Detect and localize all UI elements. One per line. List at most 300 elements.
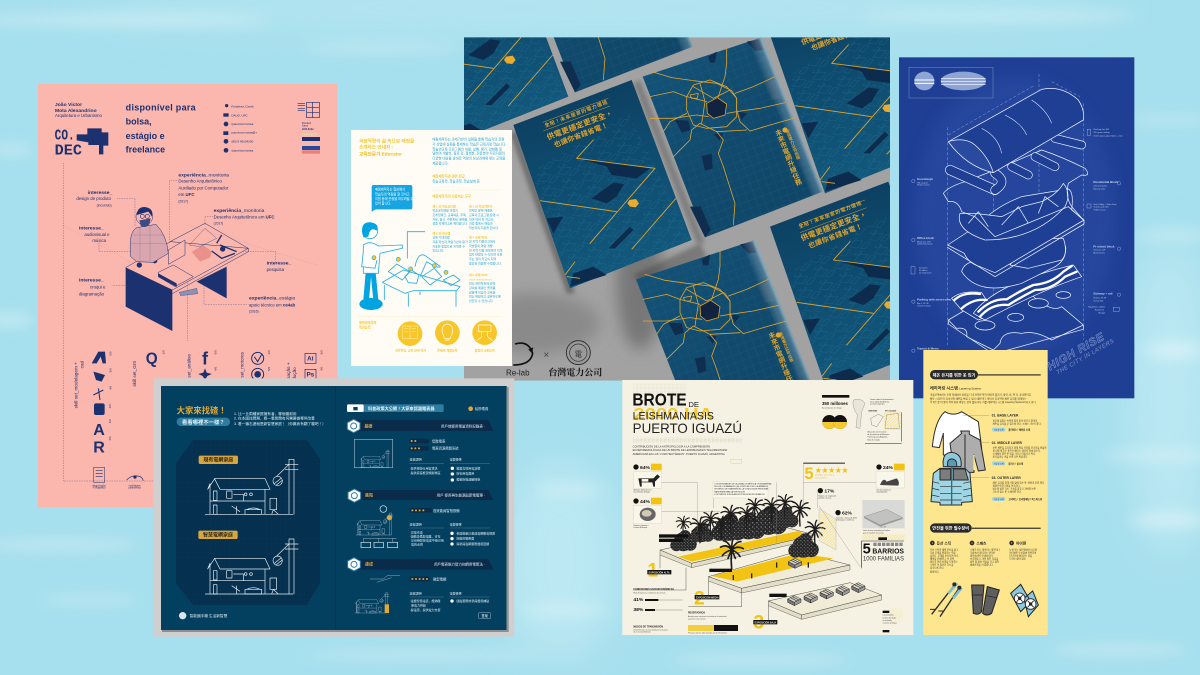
layer descriptions: 피부에 닿말는 속옷이 땀이 몸이 마르고 땀이서: [993, 418, 1037, 422]
section: level three: 用戶電表能力智力抑調用電策法 ·: [434, 562, 485, 567]
skill set columns: 5/6: [320, 350, 324, 354]
title: [632, 390, 742, 436]
item 3: crampons: 아이젠: [1016, 540, 1027, 545]
left bottom stats: [633, 588, 683, 634]
skills list: 최신 매핑하고 공유하도록: [469, 294, 501, 299]
booklet: cover right bottom: 也讓你省錢省電！: [807, 221, 864, 250]
right heading: 給節電費: [475, 406, 489, 411]
core competencies: 핵심능력: [359, 325, 371, 330]
illustration: existing home: [205, 459, 298, 514]
skill set columns: 5/6: [109, 368, 113, 372]
person illustration: [130, 207, 168, 262]
panel: pink portfolio poster: [38, 84, 337, 507]
world stats block: en la región de América: [870, 400, 890, 403]
stats 64% cattle: 64%: [640, 465, 651, 471]
related specialties: [432, 173, 501, 190]
annotation labels left: Mixed use, 12F: [917, 241, 931, 243]
label: smart home: 智慧電網家庭: [203, 532, 233, 539]
name block: Mota Alexandrino: [55, 108, 97, 114]
layer descriptions: 03. OUTER LAYER: [992, 476, 1021, 480]
headline availability: [126, 102, 197, 155]
label: existing home: [199, 456, 238, 464]
section: level three: [348, 558, 493, 619]
name block: Arquitetura e Urbanismo: [55, 113, 103, 118]
illustration: smart home: [205, 539, 298, 594]
skill set columns: 4/6: [108, 436, 112, 441]
item 2: gloves: 스패츠 또는 게이터는 발목이나: [970, 548, 1001, 552]
layer descriptions: 기능성 소재: [994, 428, 1004, 432]
booklet: cover right bottom: 供電更穩定更安全，: [799, 209, 868, 243]
subtitle: AMERICANA EN LAS "2.000 HECTÁREAS", PUERTO IGUAZÚ, ARGENTINA: [633, 451, 725, 456]
skills list: 매핑제작자의 사용하는 도구: [432, 193, 471, 198]
speech bubble: 지원 등에 관정을 마우려될 수: [375, 196, 413, 201]
section: level three: 建置說明: [410, 590, 422, 595]
annotation labels right: Services, 12F: [1093, 249, 1106, 252]
headline availability: freelance: [126, 145, 165, 155]
5 barrios: 5: [863, 542, 871, 558]
item 2: gloves: 발목에서의 오염에 따라: [970, 554, 994, 558]
header pill: 체온 유지를 위한 옷 입기: [933, 371, 976, 377]
skills list: 전 지역 지원하고에서: [469, 239, 496, 244]
side logos and chart: [298, 102, 320, 154]
world stats block: de la provincia de Misiones: [867, 434, 889, 436]
title: DE: [688, 400, 699, 409]
booklet: map centre: 臺灣電力公司出版: [784, 127, 802, 160]
intro paragraph: 다양한 대상을 상대로 역량의 보상과제에 맞는 교육을: [432, 155, 505, 160]
annotation labels left: Parking with street view: [917, 298, 952, 302]
annotation labels left: Transit terminal: [917, 305, 931, 308]
skills list: 각종 학습자 역량기반의 평가: [432, 239, 468, 244]
logos: Re-lab and Taiwan Power Company: 台灣電力公司: [548, 365, 602, 378]
annotation labels right: Guests and retail: [1094, 206, 1109, 209]
title: BROTE: [632, 390, 687, 410]
annotation labels left: 50 stories: [919, 266, 928, 269]
five star rating: menos de 1m: [815, 478, 827, 480]
booklet: map bottom: 未來市電網升級任務: [766, 330, 796, 391]
annotation labels left: Commercial zone: [917, 243, 933, 246]
section: level two: 電費優惠: [450, 521, 462, 526]
callouts: apoio técnico em ce4ab: [249, 302, 296, 307]
yellow hatch wall: [819, 508, 836, 550]
booklet: cover centre: 也讓你省錢省電！: [553, 120, 609, 149]
world stats block: Lorem sobre la leishmaniasis: [870, 399, 894, 401]
intro paragraph: 학술연교육 프로그램의 개발, 실행, 평가, 강화를 정: [432, 146, 502, 151]
layer descriptions: 환경으로부터 몸을 보호한다.: [993, 484, 1021, 488]
skill set columns: R: [93, 439, 105, 456]
house plot detail: [862, 500, 905, 540]
poster title: HIGH RISE: [1045, 331, 1107, 373]
annotation labels right: Roof top bar, 30F: [1094, 128, 1110, 131]
skill set columns: 4/6: [108, 404, 112, 408]
section: level one: 用戶端使用電量資料記錄表 ·: [441, 423, 485, 428]
logo: CO.DEC: [55, 128, 108, 154]
side logos and chart: Hi!3.3xbc: [302, 127, 314, 131]
left heading: [177, 405, 326, 426]
left heading: 3. 看一遍右邊就是新智慧家庭！（你贏我有翻了喔吧！）: [234, 421, 326, 426]
right bottom notes: [883, 608, 903, 632]
world stats block: MISIONES: [868, 411, 878, 413]
item 1: trekking poles: 무릎 무게를 완화하는 역할: [930, 551, 956, 555]
logo: CO.DEC: DEC: [55, 143, 82, 159]
annotation labels left: Sourdough: [917, 177, 933, 181]
layer descriptions: 기능성 소재: [994, 461, 1004, 465]
illustration: mid layer fleece: [950, 431, 985, 472]
skills list: 과정 중에서 매핑과: [469, 221, 493, 226]
header pill: [930, 370, 1041, 379]
section: level three: 電費優惠: [450, 590, 462, 595]
stats 17%: 17%: [824, 489, 835, 495]
layer descriptions: 소재에서 좋은 옷 입을 가지고 어울리기 적다.: [993, 452, 1036, 456]
item 1: trekking poles: 등산 스틱은 체중 분산을 돕고: [930, 548, 959, 552]
annotation labels left: 12 retail levels: [919, 272, 932, 275]
layer descriptions: 01. BASE LAYER: [992, 414, 1019, 418]
callouts: design de produto: [76, 196, 112, 201]
annotation labels left: Bay 1, 2F, 3F: [917, 303, 929, 305]
skills list: 검증 자체하고로 제작합니다.: [432, 221, 468, 226]
section: level two: ·儲能設備與電器，可在: [410, 534, 441, 539]
skill set columns: 5/6: [267, 367, 271, 371]
annotation labels right: Atrium levels: [1093, 251, 1105, 254]
stats 24%: el peridomicilio: [876, 491, 887, 493]
bacon stripes: [952, 265, 1082, 320]
annotation labels right: Transit hub: [1093, 299, 1104, 302]
booklet: map bottom: 臺灣電力公司出版: [778, 330, 795, 363]
section: level one: 低階電表: [432, 438, 446, 443]
right bottom notes: cercanas al bosque: [883, 623, 897, 625]
callouts: [76, 172, 296, 313]
centre note: MANTIENEN PARA LA EXPOSICIÓN.: [714, 490, 746, 493]
left bottom stats: de un insecto flebótomo: [633, 631, 651, 634]
annotation labels right: Residential Block: [1093, 180, 1119, 184]
left bottom stats: 41%: [633, 597, 644, 603]
right heading: [347, 404, 489, 412]
world stats block: Ubicación en el noreste: [867, 430, 886, 433]
palm trees and bushes: [670, 495, 825, 580]
item 2: gloves: [970, 540, 1001, 615]
item 3: crampons: 눈길 또는 빙판길에서 미끄럼: [1009, 548, 1037, 552]
centre note: ROL EN LOS ANIMALES QUE CONVIVEN CON LOS ANIMALES: [714, 485, 769, 488]
annotation labels right: Green space, glass floors + view: [1094, 134, 1123, 137]
skills list: 강의를 매핑인 플랫폼: [469, 285, 496, 290]
related specialties: 학습교육학, 학습과학, 학습설계 등: [432, 178, 480, 183]
skill set columns: [73, 348, 324, 490]
exposure level labels: 2: [694, 588, 705, 609]
item 1: trekking poles: 장비이다.: [930, 569, 940, 573]
headline availability: estágio e: [126, 131, 165, 141]
skill set columns: skill set_GIS: [132, 361, 137, 387]
headline availability: disponível para: [126, 102, 197, 112]
world stats block: [822, 395, 902, 443]
callouts: (2016): [249, 309, 259, 313]
skill set columns: 4/6: [108, 419, 112, 423]
annotation labels right: [1087, 128, 1123, 314]
top bun: [948, 88, 1084, 173]
skills list: 학습자의 지원을 합니다.: [469, 225, 499, 230]
heading: 소개하는 안내자 :: [359, 144, 394, 151]
annotation labels right: Public terrace: [1094, 208, 1107, 211]
annotation labels left: 50 offices: [919, 270, 927, 272]
left heading: 1. 比一比兩種家庭擁有者，哪個最耐用: [234, 411, 297, 416]
speech bubble: 학습자의 역량을 할 것이고: [375, 191, 410, 196]
speech bubble: 매핑제작자는 협상에서: [375, 187, 405, 192]
annotation labels right: Lofts and suites: [1093, 184, 1107, 187]
lettuce frill: [943, 150, 1088, 237]
section: level two: ·太陽光電: [410, 529, 423, 534]
skills list: 최신 관련학술에 관한: [469, 281, 496, 286]
layer descriptions: 봄가을이나 겨울 산행 기본 의류이다.: [993, 455, 1028, 459]
layer descriptions: 기능이 있는 옷 소재여야 한다.: [993, 490, 1022, 494]
booklet: map bottom: [636, 240, 810, 380]
stats 64% cattle: Animales domésticos en: [634, 489, 652, 492]
annotation labels right: Pr mixed block: [1093, 244, 1115, 248]
logos: Re-lab and Taiwan Power Company: 電: [575, 350, 583, 359]
thumbnail burgers: [909, 67, 993, 98]
section: level three: ·電費智慧電表，能夠確: [410, 598, 441, 603]
title: 2000 HA: [633, 406, 713, 423]
label: smart home: [198, 531, 238, 539]
cheese strips: [950, 138, 1082, 190]
annotation labels right: Station, 2F, 3F: [1093, 296, 1107, 299]
exposure level labels: EXPOSICIÓN ALTA: [649, 571, 670, 574]
item 1: trekking poles: 등산 스틱: [937, 540, 951, 545]
section: level three: 保電力供給: [411, 602, 426, 607]
layer descriptions: 고어텍스 / 오리털패딩 / 옥스퍼드류: [1008, 497, 1043, 501]
section: level two: 參與能量計畫與電網聯電規劃: [456, 530, 495, 535]
skill set columns: skill set_análise: [186, 354, 191, 387]
section: level one: 電表資源規劃系統: [432, 446, 459, 451]
stats 17%: Hogares con vegetación: [818, 494, 836, 497]
five star rating: [803, 463, 849, 483]
layer descriptions: [963, 414, 1046, 501]
layer descriptions: 02. MIDDLE LAYER: [992, 441, 1022, 445]
heading: 교육전문가 Educator: [359, 150, 402, 157]
skills list: 학습코드매핑 과정의: [432, 208, 458, 213]
booklet: cover right bottom: 全陪！未來居家的電力環境: [798, 200, 862, 230]
5 barrios: [861, 537, 904, 568]
skills list: 제 2 과 테크랩: [432, 230, 450, 235]
skill set columns: 2/6: [161, 350, 165, 354]
name block: João Victor: [55, 102, 82, 108]
right heading: 科普政策大公開！大家來認識電表器: [368, 405, 435, 411]
skills list: 업자 대행할 수 있으며 또한: [469, 252, 503, 257]
section: level one: 電費優惠: [450, 457, 462, 462]
item 1: trekking poles: 1: [932, 541, 934, 545]
skill set columns: skill set_modelagem +: [73, 362, 78, 408]
section: level two: 得參與電網服務費用回饋: [456, 541, 489, 546]
subtitle: [633, 444, 742, 463]
callouts: Desenho Arquitetônico em UFC: [214, 215, 275, 220]
intro paragraph: 각 산업에 실험을 통제하는 학습은 교육과정 학습니다.: [432, 141, 506, 146]
callouts: em UFC: [178, 192, 194, 197]
panel: yellow Korean outdoor clothing guide: [923, 350, 1048, 635]
callouts: experiência_estágio: [249, 296, 296, 302]
skill set columns: skill set_motores: [239, 351, 244, 387]
thin connector lines: [662, 463, 876, 567]
skills list: 안전할 수 있습니다.: [469, 298, 494, 303]
annotation labels left: Office block: [917, 236, 934, 240]
section: level three: 儲電服務的參與費用補貼: [456, 598, 489, 603]
left bottom stats: MODOS DE TRANSMISIÓN: [633, 625, 663, 628]
callouts: pesquisa: [267, 267, 285, 272]
title: LEISHMANIASIS: [633, 410, 714, 422]
contact list: Fortaleza, Ceará: [231, 104, 254, 108]
5 barrios: BARRIOS: [872, 547, 904, 556]
panel: Brote de Leishmaniasis infographic: [622, 380, 913, 635]
callouts: experiência_monitoria: [214, 208, 265, 214]
skill set columns: produção: [292, 367, 297, 387]
left bottom stats: 38%: [633, 607, 644, 613]
intro paragraph: [432, 137, 506, 165]
centre note: LOS PERROS SON LA REDUCCIÓN DE BROTE HÚMEDOS: [714, 493, 765, 496]
left heading: 2. 在本圖找問題，看一看房間有何需要做哪些改善: [234, 416, 315, 421]
section: level one: 建置說明: [410, 457, 422, 462]
title: PUERTO IGUAZÚ: [633, 421, 742, 436]
five star rating: 5: [804, 464, 814, 483]
layer descriptions: 보온 체온을 유지하기 위해 의류 사이를 공기층을 만들어: [993, 446, 1046, 450]
callouts: (2017): [214, 222, 223, 226]
skills list: 교육 기대역량: [432, 235, 450, 240]
skill set columns: animação +: [286, 362, 291, 387]
heading: 과정역량의 삶 속으로 매핑을: [359, 137, 415, 144]
speech bubble: 있어 합니다.: [375, 201, 391, 206]
layering intro: [930, 384, 1037, 404]
booklet: cover centre: 全陪！未來居家的電力環境: [544, 99, 608, 129]
section pill essentials: [930, 523, 1041, 533]
skills list: 주는 권리 학교의 지역: [469, 256, 496, 261]
poster title: THE CITY IN LAYERS: [1056, 338, 1116, 376]
speech bubble: [372, 185, 413, 212]
terrace 3: [768, 583, 882, 619]
terrace 1: [660, 525, 815, 568]
exposure level labels: EXPOSICIÓN BAJA: [755, 621, 776, 624]
skills list: 차트, 형식, 구현계획, 문제를: [432, 216, 468, 221]
skills list: 제 5 과제 SNS: [469, 272, 488, 277]
booklet: map top centre: [554, 37, 693, 92]
panel: photo of booklets on concrete: [464, 37, 890, 380]
stats 44% dog: la zona de bosque: [634, 527, 647, 529]
dotted leader lines: [63, 163, 317, 481]
house plot detail: Lotes de tierra ocupados por familias: [863, 529, 890, 532]
item 3: crampons: 단단하게 잡아주는 것을: [1009, 554, 1033, 558]
skill set columns: + infográfico: [93, 487, 106, 490]
patty: [962, 247, 1066, 288]
item 2: gloves: 스패츠: [976, 540, 987, 545]
panel: dark blue Taipower brochure spread: [153, 378, 514, 637]
callouts: música: [92, 238, 107, 243]
skill set columns: A: [93, 422, 105, 439]
world stats block: de personas en riesgo: [822, 406, 843, 409]
stats 62%: del bosque en 2,000 has: [836, 520, 854, 522]
skills list: social network service: [469, 278, 492, 281]
left heading: 看看哪裡不一樣？: [182, 418, 225, 426]
subtitle: CONTRIBUCIÓN DE LA ANTROPOLOGÍA A LA COMPRENSIÓN: [633, 444, 710, 449]
contact list: DAUD, UFC: [231, 113, 248, 117]
section: level one: 推廣高效用電設備: [456, 465, 480, 470]
skills list: 제 1 과 학습코드랩: [432, 203, 456, 208]
footer left: [179, 612, 228, 619]
annotation labels right: Subway + rail: [1093, 292, 1113, 296]
centre note: DE RIESGO DE TRANSMISIÓN, LA CONDUCTA DE PERSONAS: [714, 488, 769, 491]
skills list: 프레임워크, 교육목표, 주제,: [432, 212, 467, 217]
item 2: gloves: 보호해주고, 이런 몸은 지금을: [970, 557, 999, 561]
skills list: 지표와 방법으로 지역을 수: [432, 243, 465, 248]
stats 24%: [876, 464, 905, 493]
five star rating: viviendas que están a: [815, 474, 835, 477]
annotation labels left: Transit & Metro: [917, 346, 939, 350]
skill set columns: 5/6: [214, 350, 218, 354]
annotation labels right: 2F+ green rooftop: [1094, 131, 1110, 134]
house plot detail: que se instalaron en la zona: [863, 531, 884, 534]
five star rating: ★★★★★: [815, 468, 849, 475]
world stats block: Puerto Iguazú, Argentina: [867, 436, 888, 439]
layering intro: 겨울산행에서는 추의 차체에서 바람을 더 효과적인 옷이 바람이 필하기, 바람, 비, 꽉 쟈, 효과의이유: [930, 393, 1032, 397]
item 1: trekking poles: 체중을 분배한다. 이 것의: [930, 557, 954, 561]
section: level one: 推動節能減碳措施: [456, 477, 480, 482]
skill set columns: 4/6: [320, 367, 324, 371]
item 3: crampons: 도와는 장비 필요.: [1009, 557, 1027, 561]
core competencies: 문제의 개발능력: [437, 348, 458, 353]
item 2: gloves: 2: [971, 541, 973, 545]
booklet: map centre: 未來市電網升級任務: [772, 127, 803, 188]
skills list: 교육과 프로그램 운영 시: [469, 212, 499, 217]
logos: Re-lab and Taiwan Power Company: Re-lab: [506, 368, 530, 377]
section: level one: 節省用電費用: [456, 471, 474, 476]
layer descriptions: 체온을 유지할 수 있도록 한다. 소재는 기능이 좋다.: [993, 421, 1042, 425]
skill set columns: diagramação: [92, 484, 106, 487]
skill set columns: paramétrica: [129, 487, 142, 490]
skills list: 전 지역 지원 관찰하여 지역: [469, 247, 503, 252]
booklet: cover right bottom: [770, 182, 890, 380]
bottom slice with holes: [948, 292, 1083, 354]
layering intro: 레이어링 시스템 Layering System: [930, 384, 982, 390]
logos: Re-lab and Taiwan Power Company: [506, 341, 602, 378]
right bottom notes: en viviendas: [883, 620, 892, 622]
intro paragraph: 달하며 개발하, 동료 강, 정책한, 전문분야 자료지원의: [432, 151, 505, 156]
stats 64% cattle: las viviendas del lugar: [634, 492, 650, 494]
reservoirs pictogram: Animales que mantienen el parásito en la naturaleza: [688, 615, 727, 618]
section: level one: ·提供便捷化用電資訊: [410, 465, 438, 470]
layering intro: 각 4은 옷 이 옷이 적이 통한 의류는 것이 필요하다. 이를 레이어링 시스템 Layering System이라고 한다.: [930, 400, 1037, 404]
right bottom notes: factores de riesgo: [883, 616, 896, 619]
section: level three: 微型電網: [433, 576, 447, 581]
skills list: 학습권의 역량 개발: [469, 243, 493, 248]
layer descriptions: 방수와 방풍 기능, 구조를 갖추고 가벼워 보온: [993, 487, 1037, 491]
figure with table illustration: [359, 222, 460, 310]
skill set columns: Ai: [307, 356, 314, 363]
exposure level labels: [647, 534, 787, 633]
dimension guide lines: [947, 74, 1083, 350]
stats 17%: próxima a la casa: [818, 497, 831, 499]
callouts: Auxiliado por Computador: [178, 186, 229, 191]
world stats block: 350 millones: [822, 401, 849, 406]
subtitle: ECOEPIDEMIOLÓGICA DE UN BROTE DE LEISHMANIASIS TEGUMENTARIA: [633, 447, 728, 452]
callouts: diagramação: [79, 291, 105, 296]
exploded sandwich layers: [943, 88, 1088, 354]
skills list: 하여 여러 학 학교의: [469, 216, 494, 221]
terrace 2: [708, 552, 850, 593]
item 3: crampons: 3: [1011, 541, 1013, 545]
annotation labels left: [911, 177, 952, 352]
section: level two: 進階: [365, 492, 373, 498]
logos: Re-lab and Taiwan Power Company: ×: [543, 350, 549, 361]
callouts: (2017): [178, 199, 188, 203]
octagon comparison panel: [176, 440, 320, 605]
reservoirs pictogram: Personas que han sido afectadas por la enfermedad: [688, 632, 727, 635]
item 2: gloves: 발목 및 발판 역할을 하고 있어: [970, 560, 999, 564]
5 barrios: 1000 FAMILIAS: [863, 556, 904, 562]
callouts: interesse_: [79, 278, 104, 284]
stats 44% dog: Hogares próximos a: [634, 525, 649, 527]
